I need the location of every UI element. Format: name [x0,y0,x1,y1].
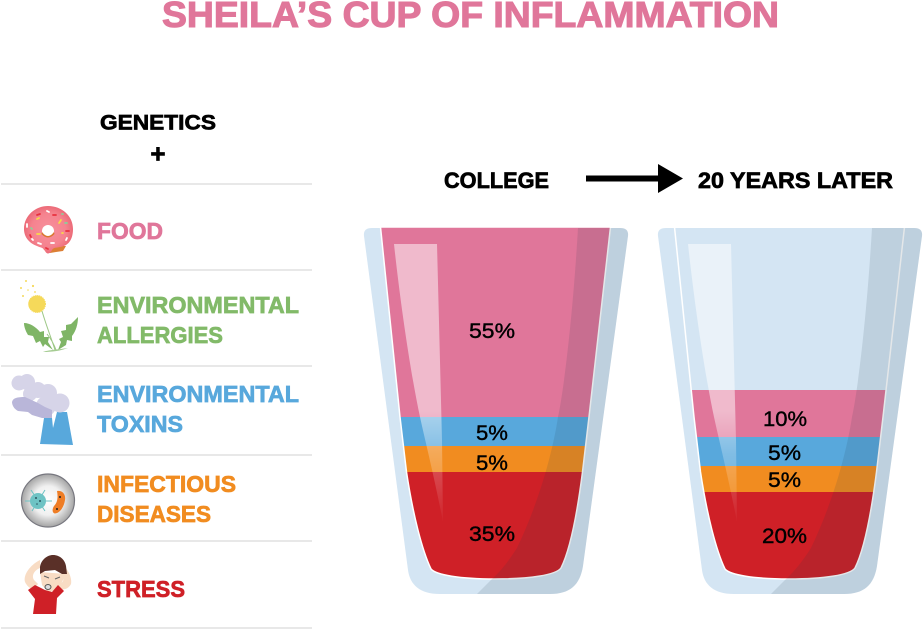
value: infectious 5%: 5% [476,452,508,475]
value: stress 20%: 20% [762,525,807,548]
value: stress 35%: 35% [469,523,515,546]
icon: stressed person [25,555,71,614]
label: environmental allergies: ALLERGIES [97,322,223,348]
label: infectious diseases: INFECTIOUS [97,471,236,497]
label: infectious diseases [97,471,236,527]
label: food: FOOD [97,218,163,244]
label: environmental allergies: ENVIRONMENTAL [97,292,299,318]
heading: 20 years later: 20 YEARS LATER [698,168,893,193]
value: food 55%: 55% [469,320,515,343]
icon: dandelion [20,280,78,352]
heading: genetics plus: + [150,138,166,168]
label: environmental toxins: ENVIRONMENTAL [97,381,299,407]
value: food 10%: 10% [763,408,807,431]
heading: genetics plus: GENETICS [100,112,216,134]
cup: 20 years later [658,227,924,594]
icon: petri dish [22,474,74,527]
icon: donut [24,206,73,254]
label: environmental allergies [97,292,299,348]
heading: genetics plus [100,112,216,168]
value: infectious 5%: 5% [768,469,801,492]
label: stress: STRESS [97,576,185,602]
icon: factory with smoke [12,374,73,445]
value: toxins 5%: 5% [476,422,508,445]
arrow [586,164,683,193]
label: environmental toxins: TOXINS [97,411,183,437]
value: toxins 5%: 5% [768,442,801,465]
label: environmental toxins [97,381,299,437]
heading: college: COLLEGE [444,168,549,193]
cup: college [364,227,640,594]
label: infectious diseases: DISEASES [97,501,211,527]
